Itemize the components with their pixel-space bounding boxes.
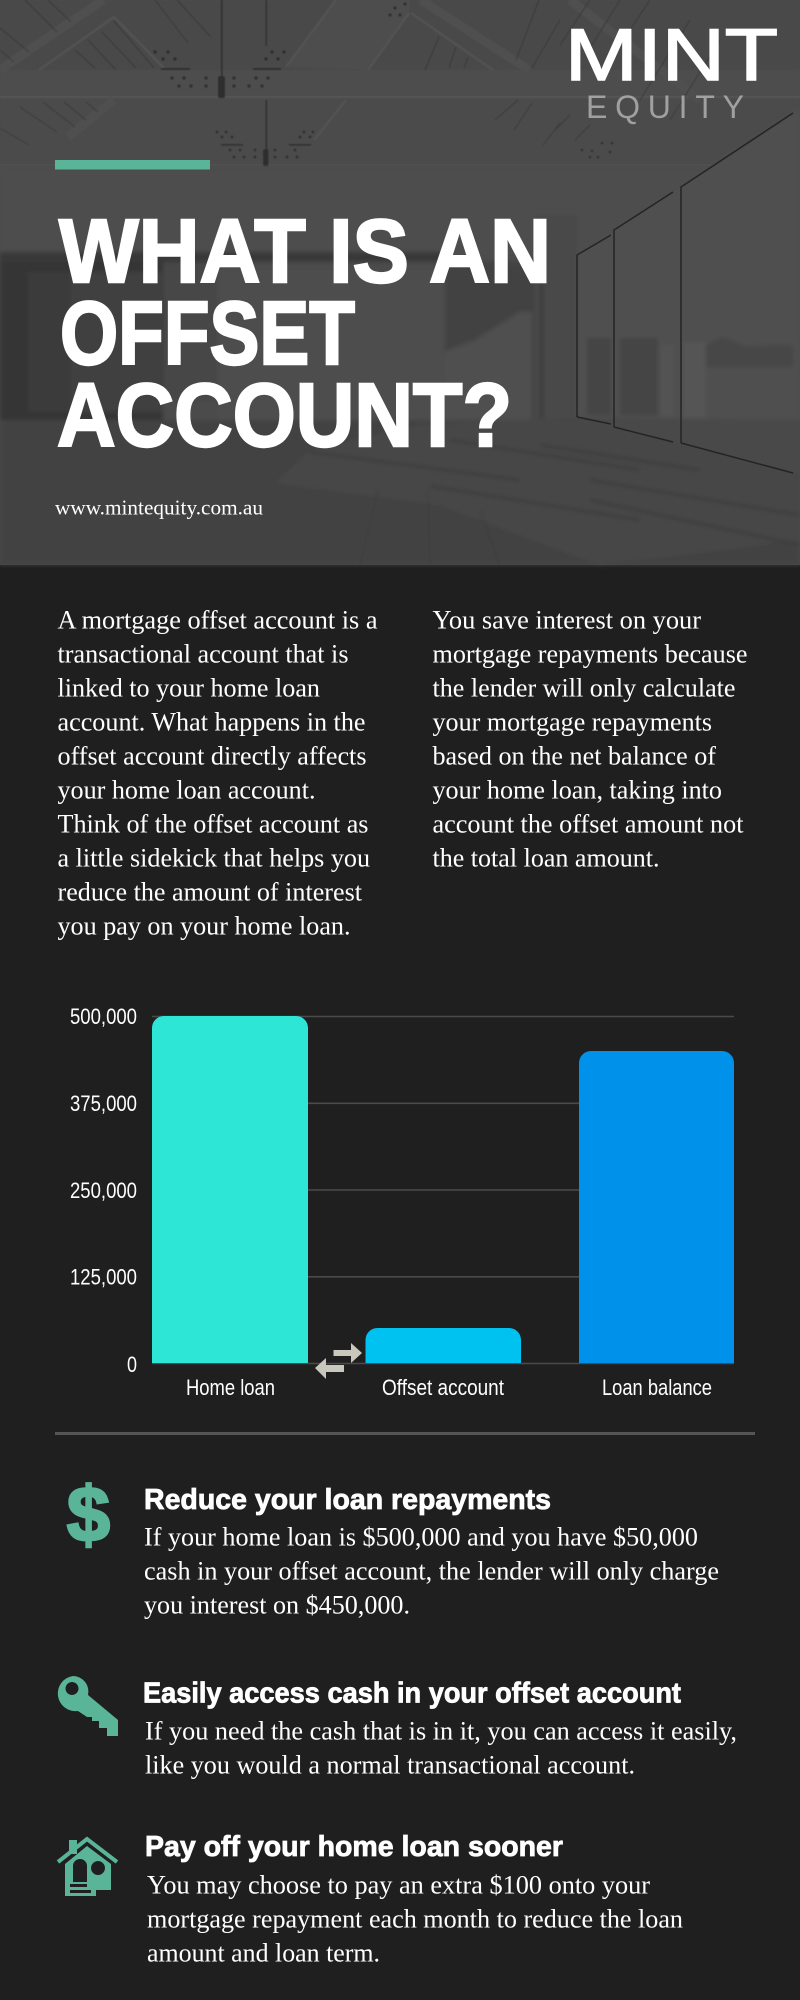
floor bbox=[0, 420, 800, 565]
icon: key bbox=[58, 1676, 118, 1736]
panel: hero photo background bbox=[0, 0, 800, 565]
y axis labels: 250,000 bbox=[70, 1178, 137, 1203]
text block: left column: A mortgage offset account is a bbox=[58, 605, 378, 635]
title bbox=[57, 202, 551, 466]
arrow: to home loan bbox=[315, 1358, 344, 1379]
icon: dollar: $ bbox=[67, 1470, 110, 1558]
text block: right column: account the offset amount not bbox=[432, 809, 744, 839]
bar: loan balance bbox=[579, 1051, 734, 1363]
text block: left column: reduce the amount of interest bbox=[58, 877, 363, 907]
title: WHAT IS AN bbox=[59, 202, 551, 302]
benefit: access cash: like you would a normal transactional account. bbox=[145, 1750, 635, 1780]
text block: right column: based on the net balance of bbox=[432, 741, 716, 771]
benefit: pay off sooner: You may choose to pay an extra $100 onto your bbox=[147, 1870, 650, 1900]
benefit: access cash bbox=[143, 1678, 737, 1780]
bar: home loan bbox=[152, 1016, 308, 1363]
y axis labels: 125,000 bbox=[70, 1264, 137, 1290]
arrow: to offset account bbox=[334, 1343, 362, 1363]
text block: right column: the lender will only calculate bbox=[432, 673, 736, 703]
text block: right column: mortgage repayments because bbox=[432, 639, 748, 669]
text block: right column: You save interest on your bbox=[432, 605, 701, 635]
text block: left column: Think of the offset account as bbox=[58, 809, 368, 839]
benefit: reduce repayments: cash in your offset account, the lender will only charge bbox=[144, 1556, 719, 1586]
y axis labels: 0 bbox=[127, 1352, 137, 1377]
x axis labels: Home loan bbox=[186, 1375, 275, 1400]
benefit: pay off sooner: Pay off your home loan sooner bbox=[145, 1831, 563, 1863]
window frames bbox=[577, 113, 793, 473]
icon: house bbox=[58, 1839, 117, 1896]
website url: www.mintequity.com.au bbox=[55, 496, 263, 520]
x axis labels: Offset account bbox=[382, 1375, 504, 1400]
text block: left column: your home loan account. bbox=[58, 775, 316, 805]
text block: left column bbox=[58, 605, 378, 941]
bar: offset account bbox=[366, 1328, 521, 1363]
divider bbox=[55, 1432, 755, 1435]
benefit: reduce repayments: you interest on $450,000. bbox=[144, 1590, 410, 1620]
x axis labels: Loan balance bbox=[602, 1375, 712, 1400]
text block: left column: transactional account that is bbox=[58, 639, 348, 669]
y axis labels bbox=[70, 1004, 137, 1377]
text block: left column: you pay on your home loan. bbox=[58, 911, 350, 941]
benefit: access cash: If you need the cash that is in it, you can access it easily, bbox=[145, 1716, 737, 1746]
text block: right column: your home loan, taking into bbox=[432, 775, 722, 805]
title: ACCOUNT? bbox=[57, 366, 512, 466]
text block: left column: a little sidekick that helps you bbox=[58, 843, 370, 873]
back wall bbox=[0, 168, 800, 258]
logo wordmark: MINT bbox=[565, 15, 778, 96]
text block: left column: linked to your home loan bbox=[58, 673, 320, 703]
y axis labels: 375,000 bbox=[70, 1091, 137, 1116]
benefit: pay off sooner bbox=[145, 1831, 683, 1968]
x axis labels bbox=[186, 1375, 712, 1400]
text block: left column: account. What happens in the bbox=[58, 707, 366, 737]
bar chart bbox=[70, 1004, 734, 1400]
text block: left column: offset account directly affects bbox=[58, 741, 366, 771]
text block: right column bbox=[432, 605, 748, 873]
benefit: reduce repayments bbox=[144, 1484, 719, 1620]
logo subtitle: EQUITY bbox=[586, 89, 744, 125]
accent bar bbox=[55, 160, 210, 170]
benefit: pay off sooner: mortgage repayment each month to reduce the loan bbox=[147, 1904, 683, 1934]
text block: right column: your mortgage repayments bbox=[432, 707, 712, 737]
benefit: reduce repayments: Reduce your loan repayments bbox=[144, 1484, 551, 1516]
window panes bbox=[577, 108, 800, 475]
logo bbox=[565, 15, 778, 125]
benefit: pay off sooner: amount and loan term. bbox=[147, 1938, 380, 1968]
benefit: access cash: Easily access cash in your offset account bbox=[143, 1678, 681, 1710]
title: OFFSET bbox=[60, 284, 355, 384]
y axis labels: 500,000 bbox=[70, 1004, 137, 1029]
text block: right column: the total loan amount. bbox=[432, 843, 660, 873]
benefit: reduce repayments: If your home loan is $500,000 and you have $50,000 bbox=[144, 1522, 698, 1552]
